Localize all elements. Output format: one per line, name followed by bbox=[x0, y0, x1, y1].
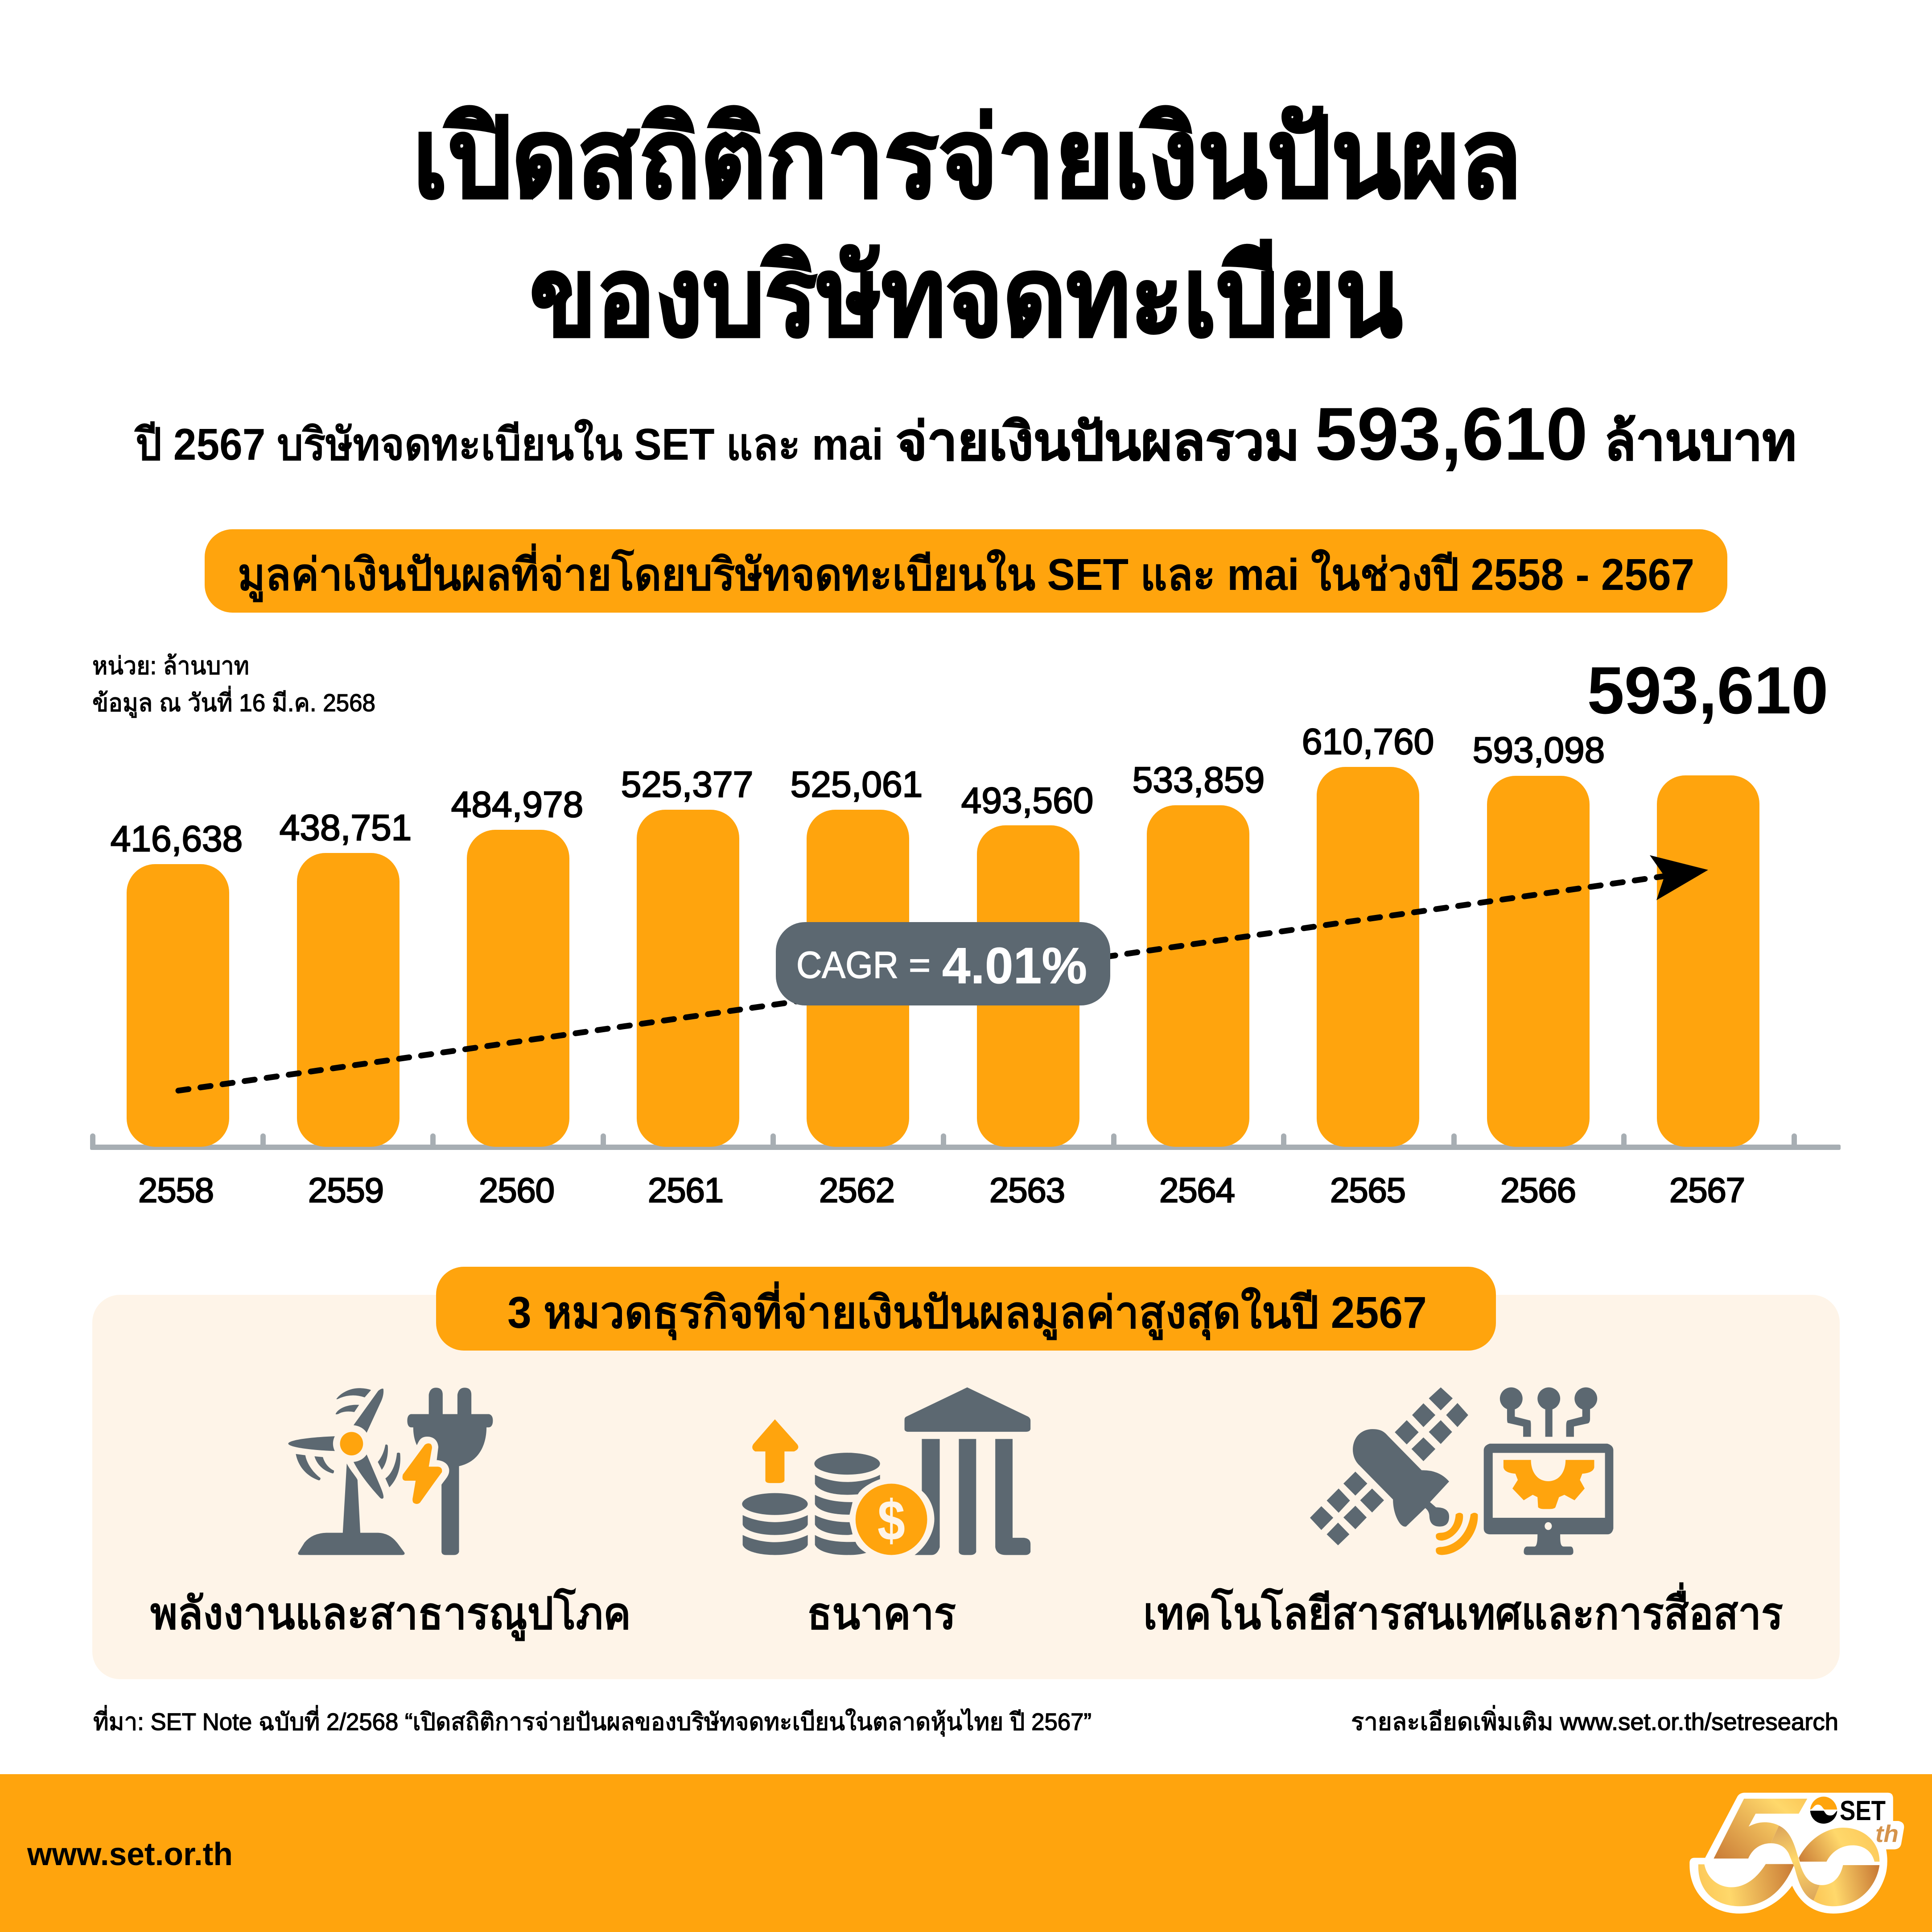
heading pill: sectors bbox=[436, 1267, 1496, 1351]
bar 2563: 2563 bbox=[989, 1170, 1065, 1210]
sector label: energy: พลังงานและสาธารณูปโภค bbox=[150, 1587, 631, 1641]
icon: wind turbine and plug bbox=[288, 1388, 493, 1555]
bar 2566 bbox=[1473, 730, 1605, 1210]
chart note bbox=[92, 652, 375, 718]
chart note: ข้อมูล ณ วันที่ 16 มี.ค. 2568 bbox=[92, 686, 375, 718]
sector label: banking: ธนาคาร bbox=[807, 1589, 956, 1639]
bar 2564: 533,859 bbox=[1133, 760, 1265, 800]
bar 2563 bbox=[961, 780, 1093, 1210]
bar 2558: 416,638 bbox=[111, 819, 243, 859]
callout: CAGR: CAGR bbox=[796, 944, 898, 986]
bar 2562: 525,061 bbox=[791, 764, 923, 805]
bar 2560 bbox=[451, 784, 583, 1210]
bar 2567 bbox=[1587, 653, 1828, 1210]
subtitle: ปี 2567 บริษัทจดทะเบียนใน SET และ mai bbox=[134, 419, 883, 470]
subtitle bbox=[134, 392, 1796, 476]
title bbox=[413, 96, 1522, 359]
website: www.set.or.th bbox=[27, 1837, 233, 1872]
bar 2565: 610,760 bbox=[1302, 721, 1434, 762]
logo: SET 50th: SET bbox=[1840, 1796, 1886, 1826]
bar 2564 bbox=[1133, 760, 1265, 1210]
bar 2559: 438,751 bbox=[280, 807, 412, 848]
source note: ที่มา: SET Note ฉบับที่ 2/2568 “เปิดสถิติการจ่ายปันผลของบริษัทจดทะเบียนในตลาดหุ้นไทย ปี 2567” bbox=[93, 1705, 1092, 1737]
bar 2560: 2560 bbox=[479, 1170, 555, 1210]
title: เปิดสถิติการจ่ายเงินปันผล bbox=[413, 96, 1522, 220]
bar 2567: 2567 bbox=[1669, 1170, 1745, 1210]
subtitle: ล้านบาท bbox=[1604, 412, 1796, 471]
chart axis bbox=[90, 1133, 1841, 1150]
heading pill: sectors: 3 หมวดธุรกิจที่จ่ายเงินปันผลมูลค่าสูงสุดในปี 2567 bbox=[507, 1281, 1427, 1340]
bar 2566: 2566 bbox=[1500, 1170, 1576, 1210]
more details note: รายละเอียดเพิ่มเติม www.set.or.th/setresearch bbox=[1351, 1705, 1838, 1735]
subtitle: จ่ายเงินปันผลรวม bbox=[896, 412, 1300, 471]
chart note: หน่วย: ล้านบาท bbox=[92, 652, 249, 680]
bar 2567: 593,610 bbox=[1587, 653, 1828, 728]
icon: bank and coins: $ bbox=[877, 1489, 905, 1553]
logo: SET 50th: th bbox=[1875, 1821, 1899, 1847]
bar chart bbox=[90, 653, 1841, 1210]
callout: CAGR: 4.01% bbox=[942, 938, 1087, 994]
bar 2558: 2558 bbox=[138, 1170, 214, 1210]
bar 2561 bbox=[621, 764, 753, 1210]
heading pill: chart: มูลค่าเงินปันผลที่จ่ายโดยบริษัทจดทะเบียนใน SET และ mai ในช่วงปี 2558 - 2567 bbox=[238, 543, 1694, 602]
bar 2562 bbox=[791, 764, 923, 1210]
callout: CAGR: = bbox=[909, 944, 931, 986]
bar 2562: 2562 bbox=[819, 1170, 895, 1210]
bar 2565 bbox=[1302, 721, 1434, 1210]
bar 2558 bbox=[111, 819, 243, 1210]
arrow: CAGR trend bbox=[178, 855, 1708, 1091]
bar 2560: 484,978 bbox=[451, 784, 583, 825]
heading pill: chart bbox=[205, 529, 1727, 613]
title: ของบริษัทจดทะเบียน bbox=[530, 235, 1402, 359]
subtitle: 593,610 bbox=[1315, 392, 1588, 476]
bar 2563: 493,560 bbox=[961, 780, 1093, 821]
bar 2559: 2559 bbox=[308, 1170, 384, 1210]
icon: bank and coins bbox=[742, 1388, 1030, 1555]
sector label: ICT: เทคโนโลยีสารสนเทศและการสื่อสาร bbox=[1143, 1582, 1783, 1639]
bar 2566: 593,098 bbox=[1473, 730, 1605, 770]
callout: CAGR bbox=[776, 922, 1110, 1005]
bar 2565: 2565 bbox=[1330, 1170, 1406, 1210]
footer band bbox=[0, 1774, 1932, 1932]
panel: top 3 sectors bbox=[92, 1267, 1840, 1679]
bar 2561: 525,377 bbox=[621, 764, 753, 805]
bar 2564: 2564 bbox=[1159, 1170, 1235, 1210]
icon: satellite and computer bbox=[1310, 1388, 1613, 1555]
logo: SET 50th bbox=[1689, 1793, 1904, 1914]
bar 2559 bbox=[280, 807, 412, 1210]
bar 2561: 2561 bbox=[648, 1170, 724, 1210]
